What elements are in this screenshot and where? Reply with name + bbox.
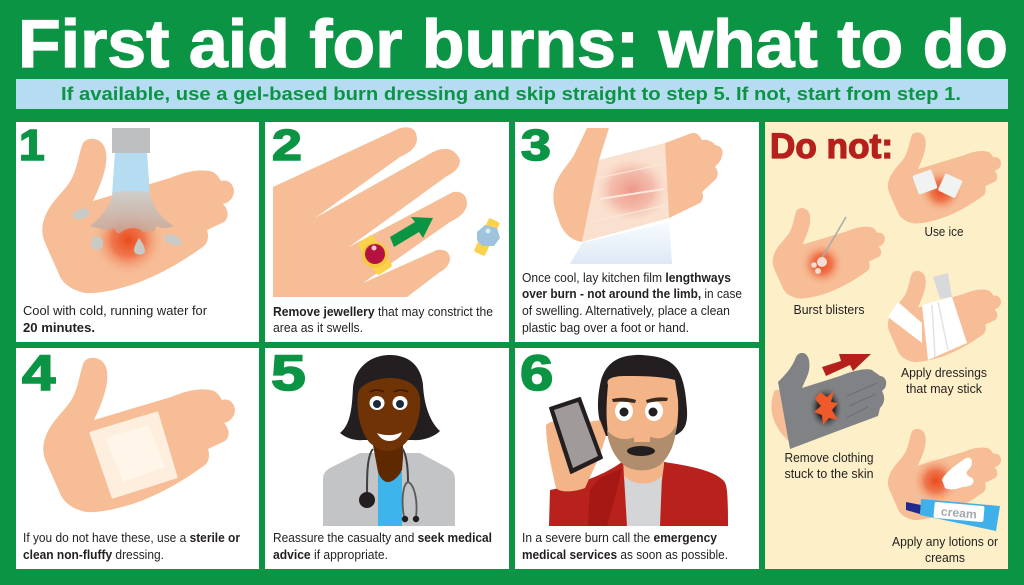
caption step 2: area as it swells. xyxy=(273,320,363,335)
illustration: arm with kitchen film xyxy=(553,128,723,264)
number 2: 2 xyxy=(272,121,302,170)
number 6: 6 xyxy=(520,345,553,401)
panel: step 5 reassure, doctor xyxy=(265,345,509,569)
number 5: 5 xyxy=(271,345,306,401)
caption step 6 xyxy=(522,530,728,562)
item: use ice: Use ice xyxy=(924,224,964,239)
illustration: hand under running tap xyxy=(42,128,234,293)
panel: step 4 dressing xyxy=(16,345,259,569)
caption step 1: Cool with cold, running water for xyxy=(23,303,208,318)
caption step 3: over burn - not around the limb, in case xyxy=(522,286,742,301)
item: burst blisters: Burst blisters xyxy=(794,302,865,317)
panel: step 6 call emergency services xyxy=(515,345,759,569)
panel: step 2 remove jewellery xyxy=(265,121,509,342)
item: apply dressings that may stick: that may stick xyxy=(906,381,982,396)
number 1: 1 xyxy=(19,120,45,170)
item: apply lotions or creams: cream xyxy=(940,504,977,522)
caption step 4: If you do not have these, use a sterile or xyxy=(23,530,240,545)
caption step 3 xyxy=(522,270,742,335)
caption step 2: Remove jewellery that may constrict the xyxy=(273,304,493,319)
number 3: 3 xyxy=(521,121,551,170)
caption step 1 xyxy=(23,303,208,335)
panel: do not xyxy=(765,122,1008,569)
item: apply dressings that may stick: Apply dressings xyxy=(901,365,987,380)
illustration: hand with sterile dressing xyxy=(43,358,235,512)
item: remove clothing stuck to the skin xyxy=(771,353,886,481)
caption step 5: Reassure the casualty and seek medical xyxy=(273,530,492,545)
item: remove clothing stuck to the skin: Remove clothing xyxy=(784,450,874,465)
caption step 3: plastic bag over a foot or hand. xyxy=(522,320,689,335)
title: First aid for burns: what to do xyxy=(18,6,1008,82)
caption step 2 xyxy=(273,304,493,335)
panel: step 1 cool with water xyxy=(16,120,259,342)
caption step 3: Once cool, lay kitchen film lengthways xyxy=(522,270,731,285)
caption step 5 xyxy=(273,530,492,562)
caption step 6: medical services as soon as possible. xyxy=(522,547,728,562)
item: apply lotions or creams: Apply any lotions or xyxy=(892,534,999,549)
caption step 4: clean non-fluffy dressing. xyxy=(23,547,164,562)
caption step 6: In a severe burn call the emergency xyxy=(522,530,718,545)
item: apply lotions or creams xyxy=(888,429,1001,565)
number 4: 4 xyxy=(22,345,56,401)
caption step 5: advice if appropriate. xyxy=(273,547,388,562)
item: apply dressings that may stick xyxy=(888,271,1001,396)
item: use ice xyxy=(888,132,1001,239)
caption step 3: of swelling. Alternatively, place a clean xyxy=(522,303,730,318)
panel: step 3 kitchen film xyxy=(515,121,759,342)
item: remove clothing stuck to the skin: stuck to the skin xyxy=(784,466,874,481)
banner: gel dressing advice xyxy=(16,79,1008,109)
banner: gel dressing advice: If available, use a gel-based burn dressing and skip straight to step 5. If not, start from step 1. xyxy=(61,84,961,104)
illustration: man on mobile phone xyxy=(546,355,728,526)
caption step 1: 20 minutes. xyxy=(23,320,95,335)
item: burst blisters xyxy=(773,208,885,317)
illustration: doctor with stethoscope xyxy=(323,355,455,526)
heading: do not: Do not: xyxy=(770,127,893,166)
illustration: hand with ring xyxy=(273,127,500,297)
item: apply lotions or creams: creams xyxy=(925,550,965,565)
caption step 4 xyxy=(23,530,240,562)
